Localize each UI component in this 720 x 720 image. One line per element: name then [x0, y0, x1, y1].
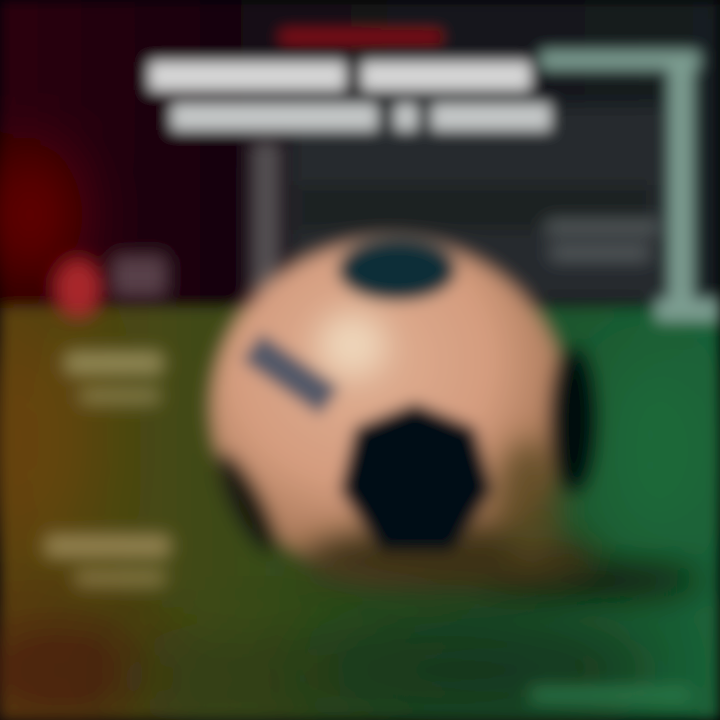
right side text block	[545, 220, 660, 260]
centre black patch	[341, 404, 491, 550]
lower left patch	[208, 449, 284, 557]
goal net	[290, 105, 665, 300]
ball label	[243, 334, 338, 414]
logo text	[112, 255, 167, 297]
right black patch	[552, 348, 596, 492]
ball right shade	[496, 440, 564, 560]
goal frame	[540, 50, 720, 322]
top patch	[339, 240, 455, 300]
title line 2	[172, 104, 550, 130]
logo icon	[54, 258, 102, 318]
goal left post	[252, 140, 280, 295]
soccer ball	[208, 238, 600, 594]
ball lower shade	[300, 526, 600, 594]
bottom right caption	[530, 688, 690, 702]
red kicker above title	[280, 30, 442, 44]
background: stadium sky	[0, 0, 720, 320]
background: grass pitch	[0, 308, 720, 720]
ball highlight	[318, 313, 386, 377]
title line 1	[150, 62, 530, 90]
left stat block 2	[45, 535, 170, 586]
title	[150, 62, 550, 130]
soccer ball shadow	[480, 564, 700, 596]
ball body	[210, 238, 570, 578]
left stat block 1	[65, 352, 163, 404]
